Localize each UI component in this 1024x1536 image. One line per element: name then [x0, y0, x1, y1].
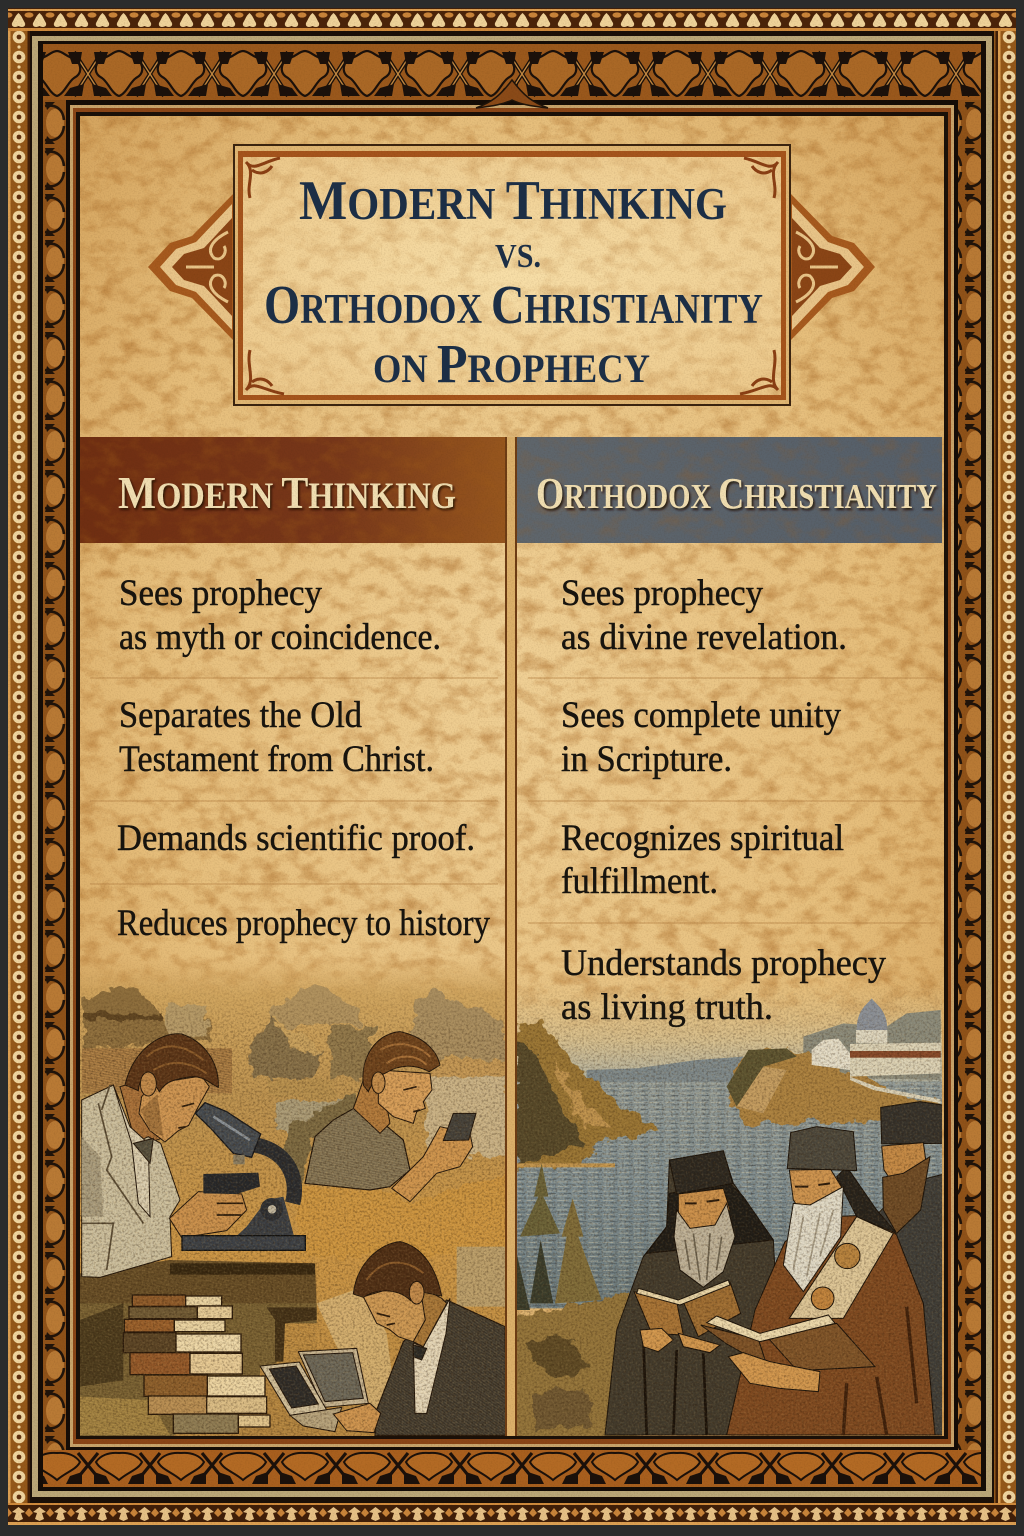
- first monk: [605, 1151, 777, 1435]
- man with laptops: [260, 1242, 507, 1435]
- sky: [517, 992, 942, 1082]
- left illustration texture: [80, 970, 505, 1436]
- point 2: [119, 695, 434, 780]
- foreground shrubs: [517, 1292, 637, 1436]
- right headland and monastery: [727, 998, 941, 1124]
- right ornament: [790, 193, 875, 341]
- title text: ON PROPHECY: [373, 333, 650, 394]
- modern thinking header: MODERN THINKING: [118, 467, 456, 518]
- point 1: [119, 573, 441, 658]
- distant town: [83, 983, 507, 1183]
- microscope: [182, 1103, 305, 1250]
- point 2: [561, 695, 841, 780]
- distant hills: [586, 1056, 744, 1082]
- river: [517, 1082, 947, 1308]
- point 1: [561, 573, 847, 658]
- point 3: fulfillment.: [561, 861, 718, 902]
- illustration: orthodox monks: [507, 983, 947, 1443]
- sepia backdrop: [80, 957, 510, 1440]
- modern thinking header: [80, 437, 505, 543]
- point 2: Separates the Old: [119, 695, 362, 736]
- illustration: modern thinkers: [80, 957, 510, 1440]
- panel: modern thinking column: [80, 437, 505, 944]
- title box: [234, 145, 790, 405]
- point 3: [561, 818, 844, 902]
- column divider: [505, 437, 517, 1436]
- title text: [264, 170, 763, 394]
- point 2: Testament from Christ.: [119, 739, 434, 780]
- point 1: Sees prophecy: [119, 573, 322, 614]
- point 1: as myth or coincidence.: [119, 617, 441, 658]
- corner flourishes: [246, 158, 778, 394]
- man with phone: [305, 1032, 476, 1202]
- panel: orthodox christianity column: [517, 437, 942, 984]
- point 1: Sees prophecy: [561, 573, 763, 614]
- top center ornament: [476, 80, 548, 108]
- point 3: Recognizes spiritual: [561, 818, 844, 859]
- scientist with microscope: [82, 1034, 247, 1277]
- shore trees: [517, 1163, 602, 1310]
- third monk: [877, 1102, 947, 1435]
- stack of books: [123, 1295, 270, 1433]
- point 3: Demands scientific proof.: [117, 818, 475, 859]
- mid ground wash: [80, 1170, 510, 1437]
- parchment panel: [80, 116, 944, 1436]
- point 1: as divine revelation.: [561, 617, 847, 658]
- point 2: Sees complete unity: [561, 695, 841, 736]
- orthodox christianity header: ORTHODOX CHRISTIANITY: [536, 469, 937, 518]
- orthodox christianity header: [517, 437, 942, 543]
- title text: ORTHODOX CHRISTIANITY: [264, 274, 763, 335]
- right illustration texture: [517, 970, 942, 1436]
- title banner: [148, 145, 875, 405]
- title text: MODERN THINKING: [299, 170, 727, 232]
- as living truth line: as living truth.: [561, 987, 773, 1028]
- title text: VS.: [495, 238, 541, 275]
- point 2: in Scripture.: [561, 739, 732, 780]
- second monk: [701, 1127, 935, 1435]
- left ornament: [148, 193, 234, 341]
- point 4: Reduces prophecy to history: [117, 903, 490, 944]
- left cliff: [517, 1023, 660, 1168]
- point 4: Understands prophecy: [561, 943, 886, 984]
